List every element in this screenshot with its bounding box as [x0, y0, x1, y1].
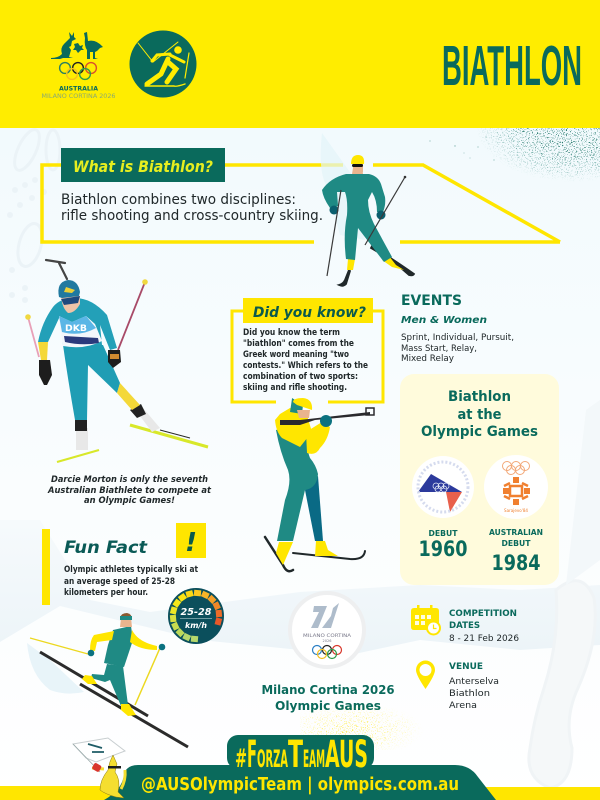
stat: Australian debut 1984: 1984	[492, 551, 540, 575]
photo: biathlete Darcie Morton	[25, 260, 208, 462]
logo: Sarajevo 1984: Sarajevo'84	[504, 508, 528, 514]
decorative indigenous pattern right	[529, 400, 600, 788]
gauge: 25-28 km/h	[168, 588, 224, 644]
icon: calendar	[411, 605, 440, 634]
logo subtext: MILANO CORTINA 2026	[42, 93, 116, 100]
footer text: @AUSOlympicTeam | olympics.com.au	[141, 774, 459, 795]
legs and body	[63, 345, 120, 420]
green footer shape	[104, 765, 496, 800]
panel: fun fact	[42, 523, 206, 605]
illustration: boxing kangaroo mascot	[73, 738, 125, 798]
competition dates: COMPETITION	[449, 609, 517, 619]
header band	[0, 0, 600, 128]
panel heading: Olympic Games	[421, 424, 538, 440]
icon: emu	[84, 32, 103, 59]
skis	[57, 450, 99, 462]
panel text: Did you know the term	[243, 328, 340, 338]
hashtag pill: AUS	[325, 733, 368, 776]
events text: Sprint, Individual, Pursuit,	[401, 333, 514, 343]
gauge: 25-28 km/h: km/h	[185, 621, 207, 630]
sparse speckles	[429, 136, 495, 161]
heading: Fun Fact	[64, 538, 148, 558]
poles	[28, 317, 39, 357]
text: an average speed of 25-28	[64, 577, 175, 587]
panel heading: Did you know?	[253, 305, 367, 321]
illustration: downhill skier	[27, 613, 188, 747]
heading: Milano Cortina 2026 Olympic Games: Olympic Games	[275, 699, 381, 713]
icon: kangaroo	[51, 32, 76, 59]
text: Olympic athletes typically ski at	[64, 565, 198, 575]
venue: Arena	[449, 701, 477, 711]
hashtag pill: EAM	[303, 745, 325, 773]
heading: Milano Cortina 2026 Olympic Games: Milano Cortina 2026	[262, 683, 394, 697]
panel heading	[243, 298, 373, 323]
panel heading: What is Biathlon?	[73, 157, 213, 176]
logo: Australia Olympic team	[42, 32, 116, 100]
logo text: AUSTRALIA	[59, 86, 98, 92]
yellow calf	[117, 383, 140, 410]
venue: Biathlon	[449, 689, 490, 699]
logo: Milano Cortina 2026: MILANO CORTINA	[303, 633, 352, 639]
icon: exclamation: !	[185, 528, 197, 558]
panel heading: Biathlon	[448, 389, 511, 405]
hashtag pill: ORZA	[257, 745, 288, 773]
panel text: rifle shooting and cross-country skiing.	[61, 208, 323, 224]
yellow strip left	[0, 786, 112, 800]
panel: did you know	[232, 298, 383, 402]
icon: biathlon pictogram	[130, 30, 196, 98]
icon: star	[73, 43, 84, 53]
olympic rings	[60, 63, 96, 79]
stat: Australian debut 1984: DEBUT	[502, 539, 531, 548]
icon: location pin	[416, 660, 435, 689]
footer	[0, 733, 600, 800]
events heading: EVENTS	[401, 293, 462, 309]
logo: Sarajevo 1984	[484, 455, 548, 519]
panel text: Greek word meaning "two	[243, 350, 349, 360]
yellow bar	[42, 529, 50, 605]
competition dates: DATES	[449, 621, 480, 631]
panel text: combination of two sports:	[243, 372, 358, 382]
panel text: Biathlon combines two disciplines:	[61, 192, 296, 208]
hashtag pill: T	[288, 733, 303, 776]
stat: debut 1960	[418, 529, 468, 561]
illustration: standing skier	[321, 133, 414, 286]
gauge: 25-28 km/h: 25-28	[180, 607, 212, 618]
decorative indigenous pattern left	[10, 126, 60, 300]
logo: Squaw Valley 1960	[412, 456, 474, 518]
text	[64, 565, 198, 598]
caption: Darcie Morton	[47, 475, 212, 506]
events text	[401, 333, 514, 364]
panel text: "biathlon" comes from the	[243, 339, 354, 349]
events list	[401, 293, 514, 364]
panel text	[61, 192, 323, 224]
rifle on back	[46, 260, 67, 279]
events text: Mixed Relay	[401, 354, 455, 364]
snowy mountains background	[0, 520, 600, 655]
panel: biathlon at the Olympic Games	[400, 374, 559, 585]
heading: Milano Cortina 2026 Olympic Games	[262, 683, 394, 713]
caption: Darcie Morton: Darcie Morton is only the seventh	[51, 475, 208, 485]
illustration: shooter	[265, 398, 374, 571]
hashtag pill	[227, 733, 374, 776]
text: kilometers per hour.	[64, 588, 148, 598]
torso and arms	[38, 298, 117, 350]
caption: Darcie Morton: an Olympic Games!	[84, 496, 175, 506]
panel text	[243, 328, 368, 393]
panel heading	[61, 148, 225, 182]
stat: Australian debut 1984: AUSTRALIAN	[489, 528, 543, 537]
bib	[59, 316, 102, 347]
yellow sleeve	[38, 342, 48, 360]
stat: debut 1960: DEBUT	[428, 529, 458, 538]
panel heading: at the	[458, 407, 502, 423]
venue: Anterselva	[449, 677, 499, 687]
speckle spray top right	[470, 128, 600, 200]
hashtag pill: F	[247, 733, 257, 776]
stat: debut 1960: 1960	[418, 537, 468, 561]
panel text: skiing and rifle shooting.	[243, 383, 347, 393]
logo: Milano Cortina 2026	[290, 593, 364, 667]
events subheading: Men & Women	[401, 315, 487, 326]
hashtag pill: #	[235, 744, 247, 774]
stat: Australian debut 1984	[489, 528, 543, 575]
gloves	[39, 360, 52, 385]
events text: Mass Start, Relay,	[401, 344, 477, 354]
panel: what is biathlon	[42, 148, 560, 242]
yellow strip right	[483, 787, 600, 800]
logo: Milano Cortina 2026: 2026	[323, 639, 331, 643]
speckle spray near hashtag	[300, 700, 430, 750]
icon: exclamation	[176, 523, 206, 558]
competition dates	[449, 609, 519, 644]
venue: VENUE	[449, 662, 483, 672]
competition dates: 8 - 21 Feb 2026	[449, 634, 519, 644]
panel frame	[42, 165, 560, 242]
venue	[449, 662, 499, 711]
head	[61, 296, 80, 313]
panel text: contests." Which refers to the	[243, 361, 368, 371]
panel frame	[232, 311, 383, 402]
caption: Darcie Morton: Australian Biathlete to compete at	[47, 486, 212, 496]
photo: biathlete Darcie Morton: DKB	[65, 324, 87, 334]
panel heading	[421, 389, 538, 440]
boots	[76, 428, 88, 450]
